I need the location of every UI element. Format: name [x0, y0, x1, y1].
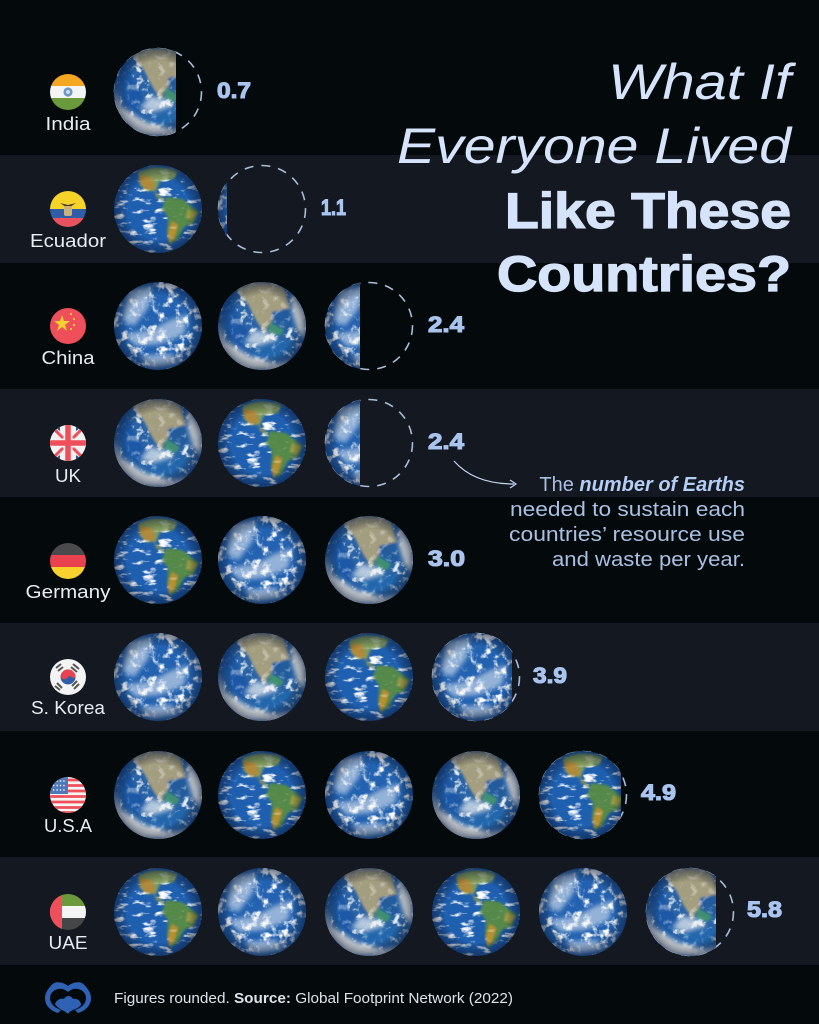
label: U.S.A: U.S.A: [44, 816, 92, 836]
row band: UAE: [0, 857, 819, 965]
row: China: [42, 282, 465, 370]
label: UK: UK: [55, 466, 81, 486]
row: UAE: [48, 868, 782, 956]
value: 3.0: 3.0: [428, 546, 465, 571]
earths: UK: [114, 399, 413, 487]
label: S. Korea: S. Korea: [31, 698, 106, 718]
callout: [509, 474, 745, 571]
flag: Ecuador: [50, 191, 86, 227]
arrow: [454, 461, 516, 488]
callout: and waste per year.: [552, 549, 745, 571]
callout: countries’ resource use: [509, 524, 745, 546]
flag: S. Korea: [50, 659, 86, 695]
title: Everyone Lived: [397, 118, 794, 174]
row: India: [46, 48, 251, 136]
value: 2.4: 2.4: [428, 429, 465, 454]
value: 1.1: 1.1: [321, 195, 346, 220]
label: UAE: UAE: [48, 933, 88, 953]
row band: UK: [0, 389, 819, 497]
flag: UK: [50, 425, 86, 461]
flag: Germany: [50, 543, 86, 579]
earths: Germany: [114, 516, 413, 604]
title: Countries?: [497, 246, 791, 302]
row: UK: [50, 399, 465, 487]
row: U.S.A: [44, 751, 676, 839]
earths: China: [114, 282, 413, 370]
earths: UAE: [114, 868, 734, 956]
row: Germany: [26, 516, 465, 604]
label: Germany: Germany: [26, 582, 110, 602]
row: S. Korea: [31, 633, 567, 721]
callout: The number of Earths: [539, 474, 745, 496]
title: [397, 54, 797, 302]
icon: logo: [45, 982, 91, 1014]
footer source: Figures rounded. Source: Global Footprint Network (2022): [114, 990, 513, 1007]
flag: India: [50, 74, 86, 110]
flag: U.S.A: [50, 777, 86, 813]
value: 3.9: 3.9: [533, 663, 567, 688]
flag: UAE: [50, 894, 86, 930]
row: Ecuador: [30, 165, 346, 253]
callout: needed to sustain each: [510, 499, 745, 521]
value: 2.4: 2.4: [428, 312, 465, 337]
value: 4.9: 4.9: [641, 780, 676, 805]
earths: Ecuador: [114, 165, 306, 253]
earths: India: [114, 48, 202, 136]
value: 5.8: 5.8: [747, 897, 782, 922]
flag: China: [50, 308, 86, 344]
label: Ecuador: Ecuador: [30, 231, 106, 251]
title: Like These: [505, 183, 791, 239]
label: China: China: [42, 348, 96, 368]
title: What If: [608, 54, 797, 110]
label: India: India: [46, 114, 92, 134]
earths: S. Korea: [114, 633, 520, 721]
earths: U.S.A: [114, 751, 627, 839]
row band: Ecuador: [0, 155, 819, 263]
value: 0.7: 0.7: [217, 78, 251, 103]
row band: S. Korea: [0, 623, 819, 731]
